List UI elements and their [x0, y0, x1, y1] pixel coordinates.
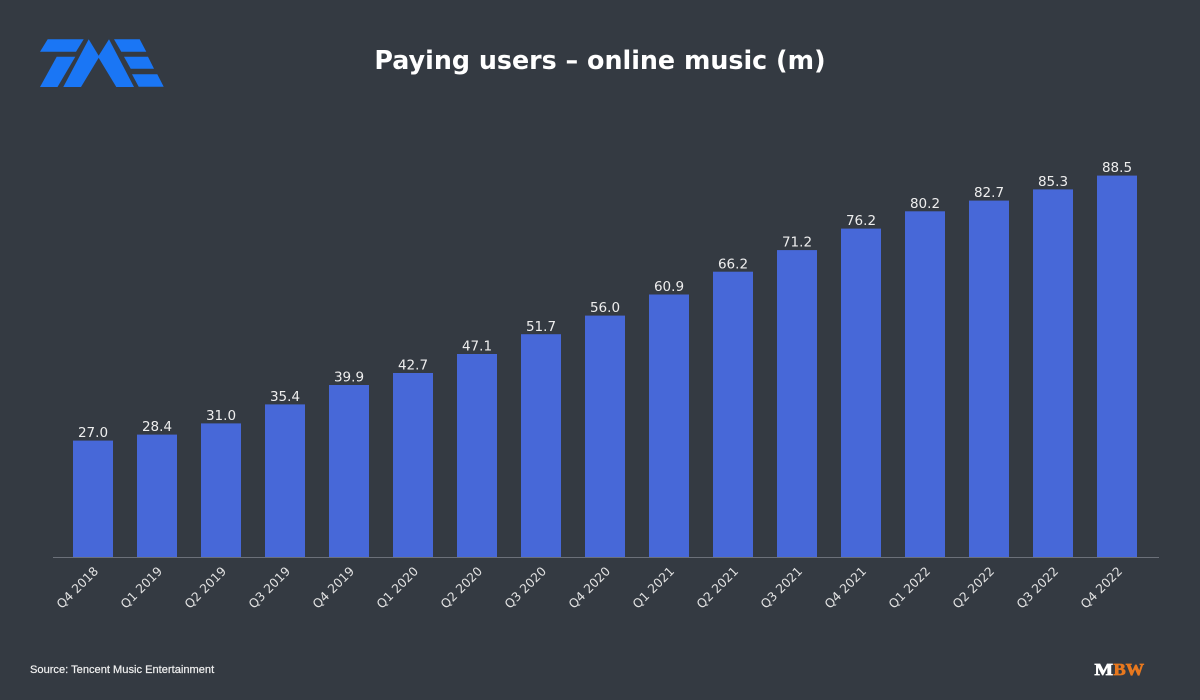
icon: MBW logo: BW: [1114, 660, 1145, 679]
value labels: 28.4: [142, 419, 172, 435]
title: Paying users – online music (m): [374, 45, 826, 75]
axis category labels: Q1 2019: [118, 564, 165, 611]
value labels: 71.2: [782, 235, 812, 251]
value labels: 82.7: [974, 185, 1004, 201]
value labels: 31.0: [206, 408, 236, 424]
axis category labels: Q4 2019: [310, 564, 357, 611]
value labels: 39.9: [334, 370, 364, 386]
value labels: 60.9: [654, 279, 684, 295]
axis category labels: Q3 2019: [246, 564, 293, 611]
icon: MBW logo: [1094, 660, 1145, 679]
axis category labels: Q2 2019: [182, 564, 229, 611]
value labels: 56.0: [590, 300, 620, 316]
axis category labels: Q4 2022: [1078, 564, 1125, 611]
value labels: 47.1: [462, 339, 492, 355]
axis category labels: Q1 2020: [374, 564, 421, 611]
axis category labels: Q2 2020: [438, 564, 485, 611]
axis category labels: Q4 2020: [566, 564, 613, 611]
axis category labels: Q4 2018: [54, 564, 101, 611]
value labels: 42.7: [398, 358, 428, 374]
axis category labels: Q1 2022: [886, 564, 933, 611]
value labels: 35.4: [270, 389, 300, 405]
value labels: [78, 160, 1132, 441]
bars: [73, 176, 1137, 557]
axis category labels: Q3 2022: [1014, 564, 1061, 611]
icon: TME logo: [40, 39, 164, 87]
value labels: 66.2: [718, 256, 748, 272]
bar chart: [53, 160, 1159, 611]
value labels: 85.3: [1038, 174, 1068, 190]
value labels: 51.7: [526, 319, 556, 335]
axis category labels: Q2 2021: [694, 564, 741, 611]
axis category labels: Q3 2021: [758, 564, 805, 611]
axis category labels: Q1 2021: [630, 564, 677, 611]
value labels: 80.2: [910, 196, 940, 212]
axis category labels: Q4 2021: [822, 564, 869, 611]
icon: MBW logo: M: [1094, 660, 1114, 679]
axis category labels: [54, 564, 1125, 611]
value labels: 88.5: [1102, 160, 1132, 176]
axis category labels: Q2 2022: [950, 564, 997, 611]
value labels: 27.0: [78, 425, 108, 441]
value labels: 76.2: [846, 213, 876, 229]
axis category labels: Q3 2020: [502, 564, 549, 611]
source note: Source: Tencent Music Entertainment: [30, 664, 214, 676]
